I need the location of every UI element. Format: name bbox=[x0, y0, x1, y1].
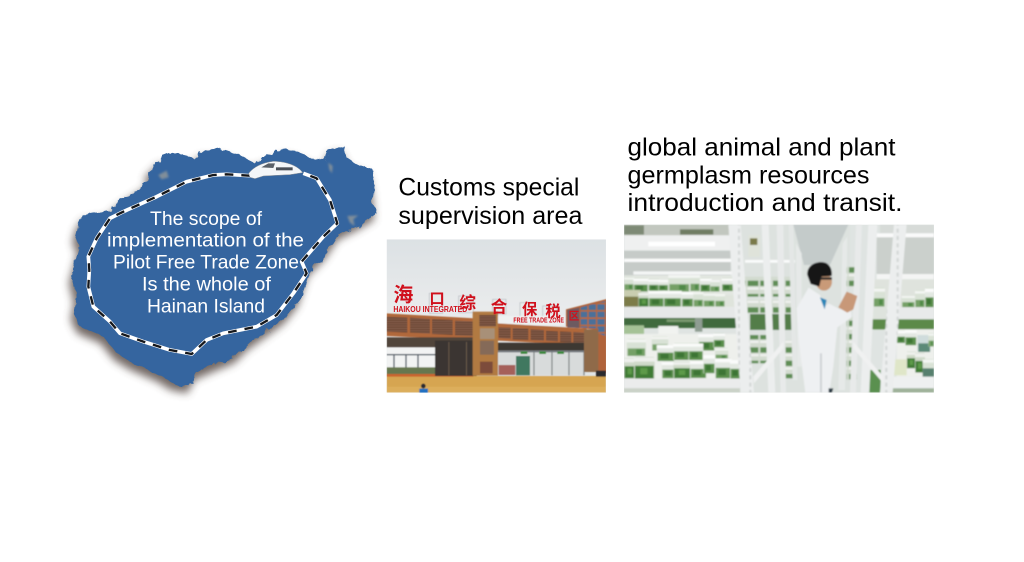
centre corridor bbox=[743, 258, 834, 392]
heading: customs area: supervision area bbox=[398, 202, 582, 230]
heading: germplasm: germplasm resources bbox=[628, 162, 870, 190]
sign frames bbox=[429, 293, 557, 319]
left jar mass bbox=[624, 334, 747, 379]
upper left bands bbox=[624, 235, 731, 250]
sign lettering bbox=[393, 284, 580, 325]
scientist bbox=[797, 288, 852, 393]
map caption bbox=[107, 208, 304, 318]
map: Hainan Island bbox=[69, 145, 377, 393]
top jars strip bbox=[624, 225, 731, 235]
heading: germplasm: global animal and plant bbox=[628, 134, 896, 162]
sign lettering: 合 bbox=[491, 296, 508, 316]
sign lettering: 口 bbox=[429, 291, 445, 308]
sign lettering: 税 bbox=[545, 304, 561, 321]
sign lettering: 海 bbox=[393, 284, 413, 307]
map caption: Pilot Free Trade Zone bbox=[113, 252, 299, 274]
right side bbox=[880, 225, 934, 233]
right roof bbox=[498, 323, 587, 345]
left shelf bbox=[624, 316, 734, 319]
shelf uprights bbox=[728, 225, 754, 393]
heading: germplasm bbox=[628, 134, 902, 217]
right building bbox=[566, 299, 607, 373]
central columns bbox=[435, 341, 477, 376]
heading: germplasm: introduction and transit. bbox=[628, 189, 902, 217]
island shape bbox=[72, 145, 377, 387]
sign lettering: 综 bbox=[459, 292, 476, 312]
diagonal lower rails bbox=[754, 346, 780, 382]
map caption: implementation of the bbox=[107, 230, 304, 252]
left bottom shelf bbox=[624, 379, 754, 388]
railway route bbox=[88, 173, 337, 354]
hanging jars bbox=[748, 235, 760, 257]
map caption: The scope of bbox=[150, 208, 263, 230]
left roof bbox=[387, 313, 475, 340]
sign lettering: 区 bbox=[569, 310, 580, 322]
sign lettering: FREE TRADE ZONE bbox=[513, 316, 564, 325]
ground bbox=[387, 376, 606, 393]
sign lettering: 保 bbox=[522, 301, 538, 318]
photo: plant germplasm laboratory bbox=[624, 225, 934, 393]
left jars top rows bbox=[642, 290, 732, 306]
sign lettering: HAIKOU INTEGRATED bbox=[393, 305, 468, 314]
map caption: Is the whole of bbox=[142, 274, 272, 296]
heading: customs area: Customs special bbox=[398, 174, 579, 202]
island shadow bbox=[69, 152, 374, 393]
map caption: Hainan Island bbox=[147, 296, 265, 318]
heading: customs area bbox=[398, 174, 582, 230]
person bbox=[421, 384, 426, 388]
photo: Haikou free trade zone gate bbox=[387, 239, 607, 393]
icon: high-speed train bbox=[249, 161, 303, 179]
